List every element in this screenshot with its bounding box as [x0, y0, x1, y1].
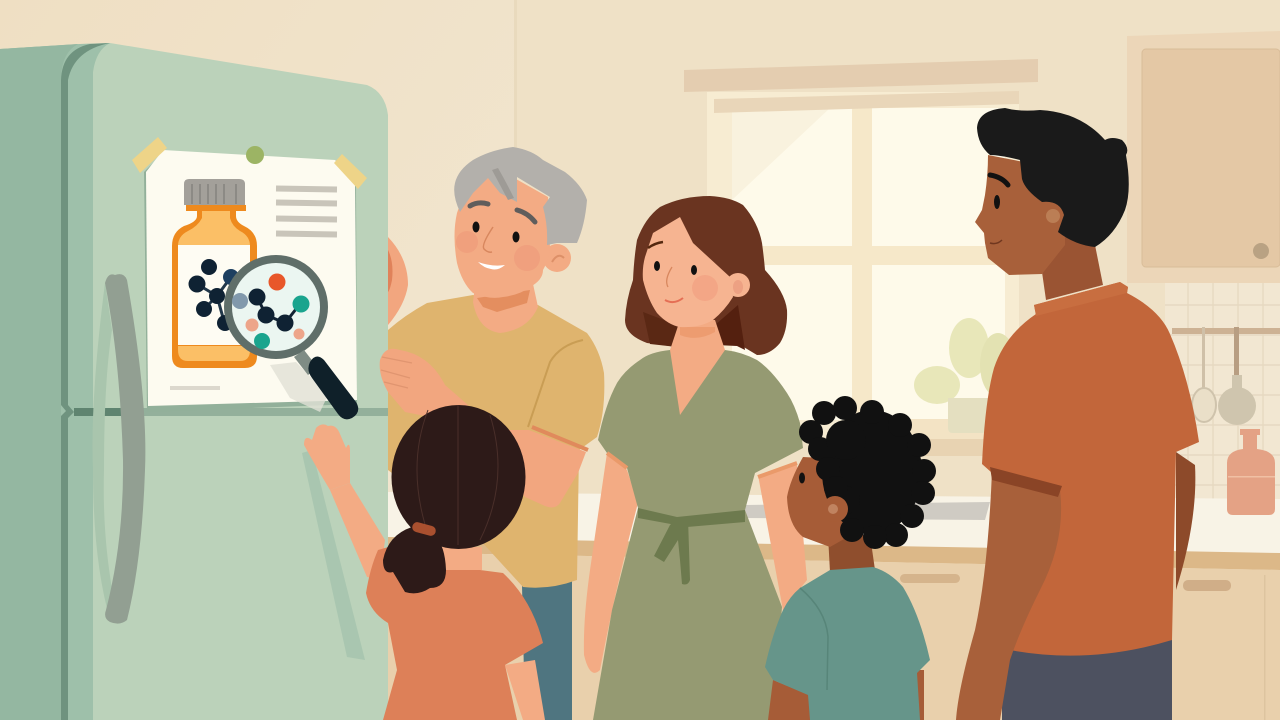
plant on windowsill	[914, 318, 1016, 433]
shirt	[982, 282, 1199, 656]
arm shadow	[302, 450, 365, 660]
arms	[917, 670, 924, 720]
neck	[828, 535, 875, 572]
dress	[593, 350, 803, 720]
upper cabinet	[1127, 31, 1280, 283]
arms	[584, 453, 638, 673]
raised hand	[388, 237, 408, 325]
hair	[977, 108, 1129, 247]
neck	[473, 270, 538, 333]
ear	[543, 244, 571, 272]
head	[787, 457, 860, 547]
sleeve cuffs	[607, 453, 797, 477]
neck	[1042, 230, 1103, 300]
hair	[454, 147, 587, 245]
lower arm	[505, 660, 545, 720]
neck	[670, 320, 725, 415]
near arm	[956, 471, 1061, 720]
head hair	[392, 405, 526, 549]
pink jar	[1227, 429, 1275, 515]
tall man	[956, 108, 1199, 720]
hand	[304, 424, 350, 490]
medicine bottle	[172, 179, 257, 368]
arm	[330, 483, 385, 580]
woman	[584, 196, 807, 720]
head	[975, 155, 1065, 275]
far arm	[1176, 452, 1195, 590]
brows and eyes	[470, 203, 488, 206]
face	[726, 273, 750, 297]
hair tie	[411, 521, 437, 537]
text lines	[170, 185, 337, 390]
jeans	[522, 580, 572, 720]
girl	[302, 405, 545, 720]
hair back	[625, 196, 787, 355]
fridge	[0, 43, 388, 720]
man holding fridge	[380, 147, 604, 720]
fridge handle	[92, 274, 145, 624]
magnifying glass	[224, 255, 358, 419]
boy	[765, 396, 936, 720]
belt	[638, 508, 745, 527]
curly hair	[799, 396, 936, 549]
forearm	[470, 430, 586, 507]
counter	[388, 492, 1280, 720]
backsplash tiles	[1165, 283, 1280, 508]
trousers	[1002, 640, 1172, 720]
shirt	[765, 567, 930, 720]
window	[684, 59, 1038, 456]
hanging utensils	[1172, 327, 1280, 425]
head	[454, 170, 550, 298]
tape	[132, 137, 367, 189]
ponytail	[383, 527, 446, 593]
neck	[440, 547, 482, 570]
molecule on bottle	[188, 259, 239, 331]
poster	[132, 137, 367, 412]
shirt	[388, 295, 604, 588]
hand on fridge	[380, 349, 468, 420]
dress	[366, 545, 543, 720]
